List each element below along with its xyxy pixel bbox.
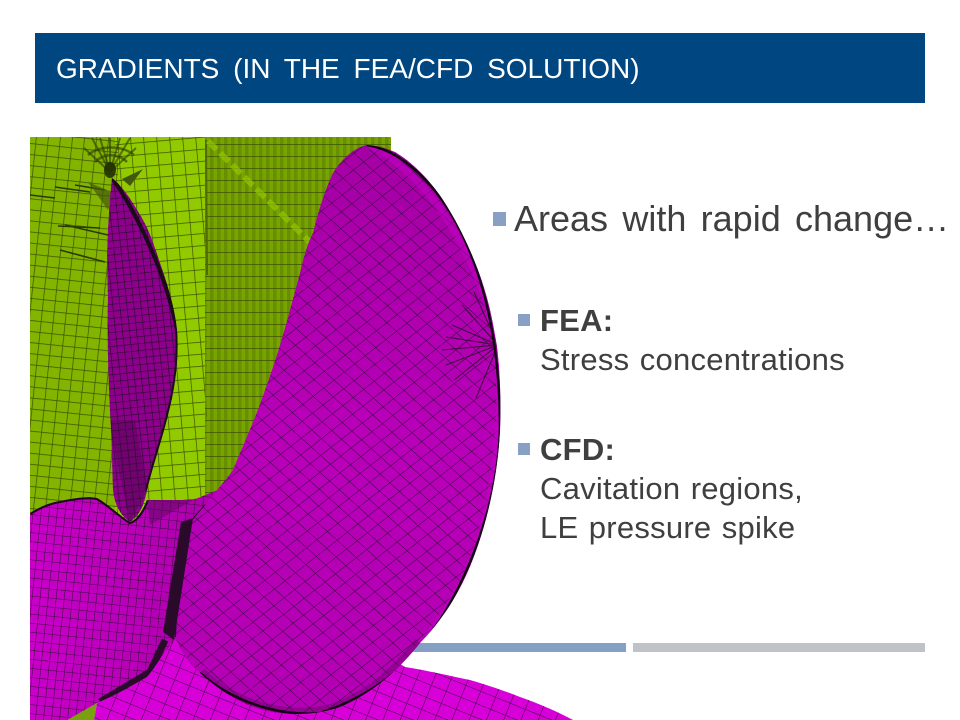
- text: FEA: FEA:: [540, 303, 613, 338]
- text: CFD: CFD:: [540, 432, 615, 467]
- small blade: [107, 178, 178, 522]
- green fluid volume mesh: [30, 137, 391, 537]
- bullet: FEA: [518, 314, 530, 326]
- text: FEA: Stress concentrations: [540, 342, 845, 377]
- footer bar: grey: [633, 643, 925, 652]
- text: areas with rapid change: Areas with rapid change…: [514, 198, 949, 239]
- bullet list: [493, 198, 949, 545]
- text: FEA: [540, 303, 845, 377]
- bullet: CFD: [518, 443, 530, 455]
- bullet: areas: [493, 212, 506, 226]
- title: GRADIENTS (IN THE FEA/CFD SOLUTION): [56, 53, 640, 84]
- footer bar: blue: [400, 643, 626, 652]
- gap between hub and blade: [163, 518, 193, 640]
- header band: [35, 33, 925, 103]
- text: CFD: LE pressure spike: [540, 510, 795, 545]
- propeller mesh image: [30, 137, 573, 720]
- radial mesh focus near the leading edge: [442, 292, 498, 398]
- hub: [30, 487, 230, 720]
- main blade: [170, 140, 510, 720]
- text: CFD: [540, 432, 803, 545]
- text: CFD: Cavitation regions,: [540, 471, 803, 506]
- green sliver at bottom: [66, 703, 97, 720]
- lower blade: [94, 638, 573, 720]
